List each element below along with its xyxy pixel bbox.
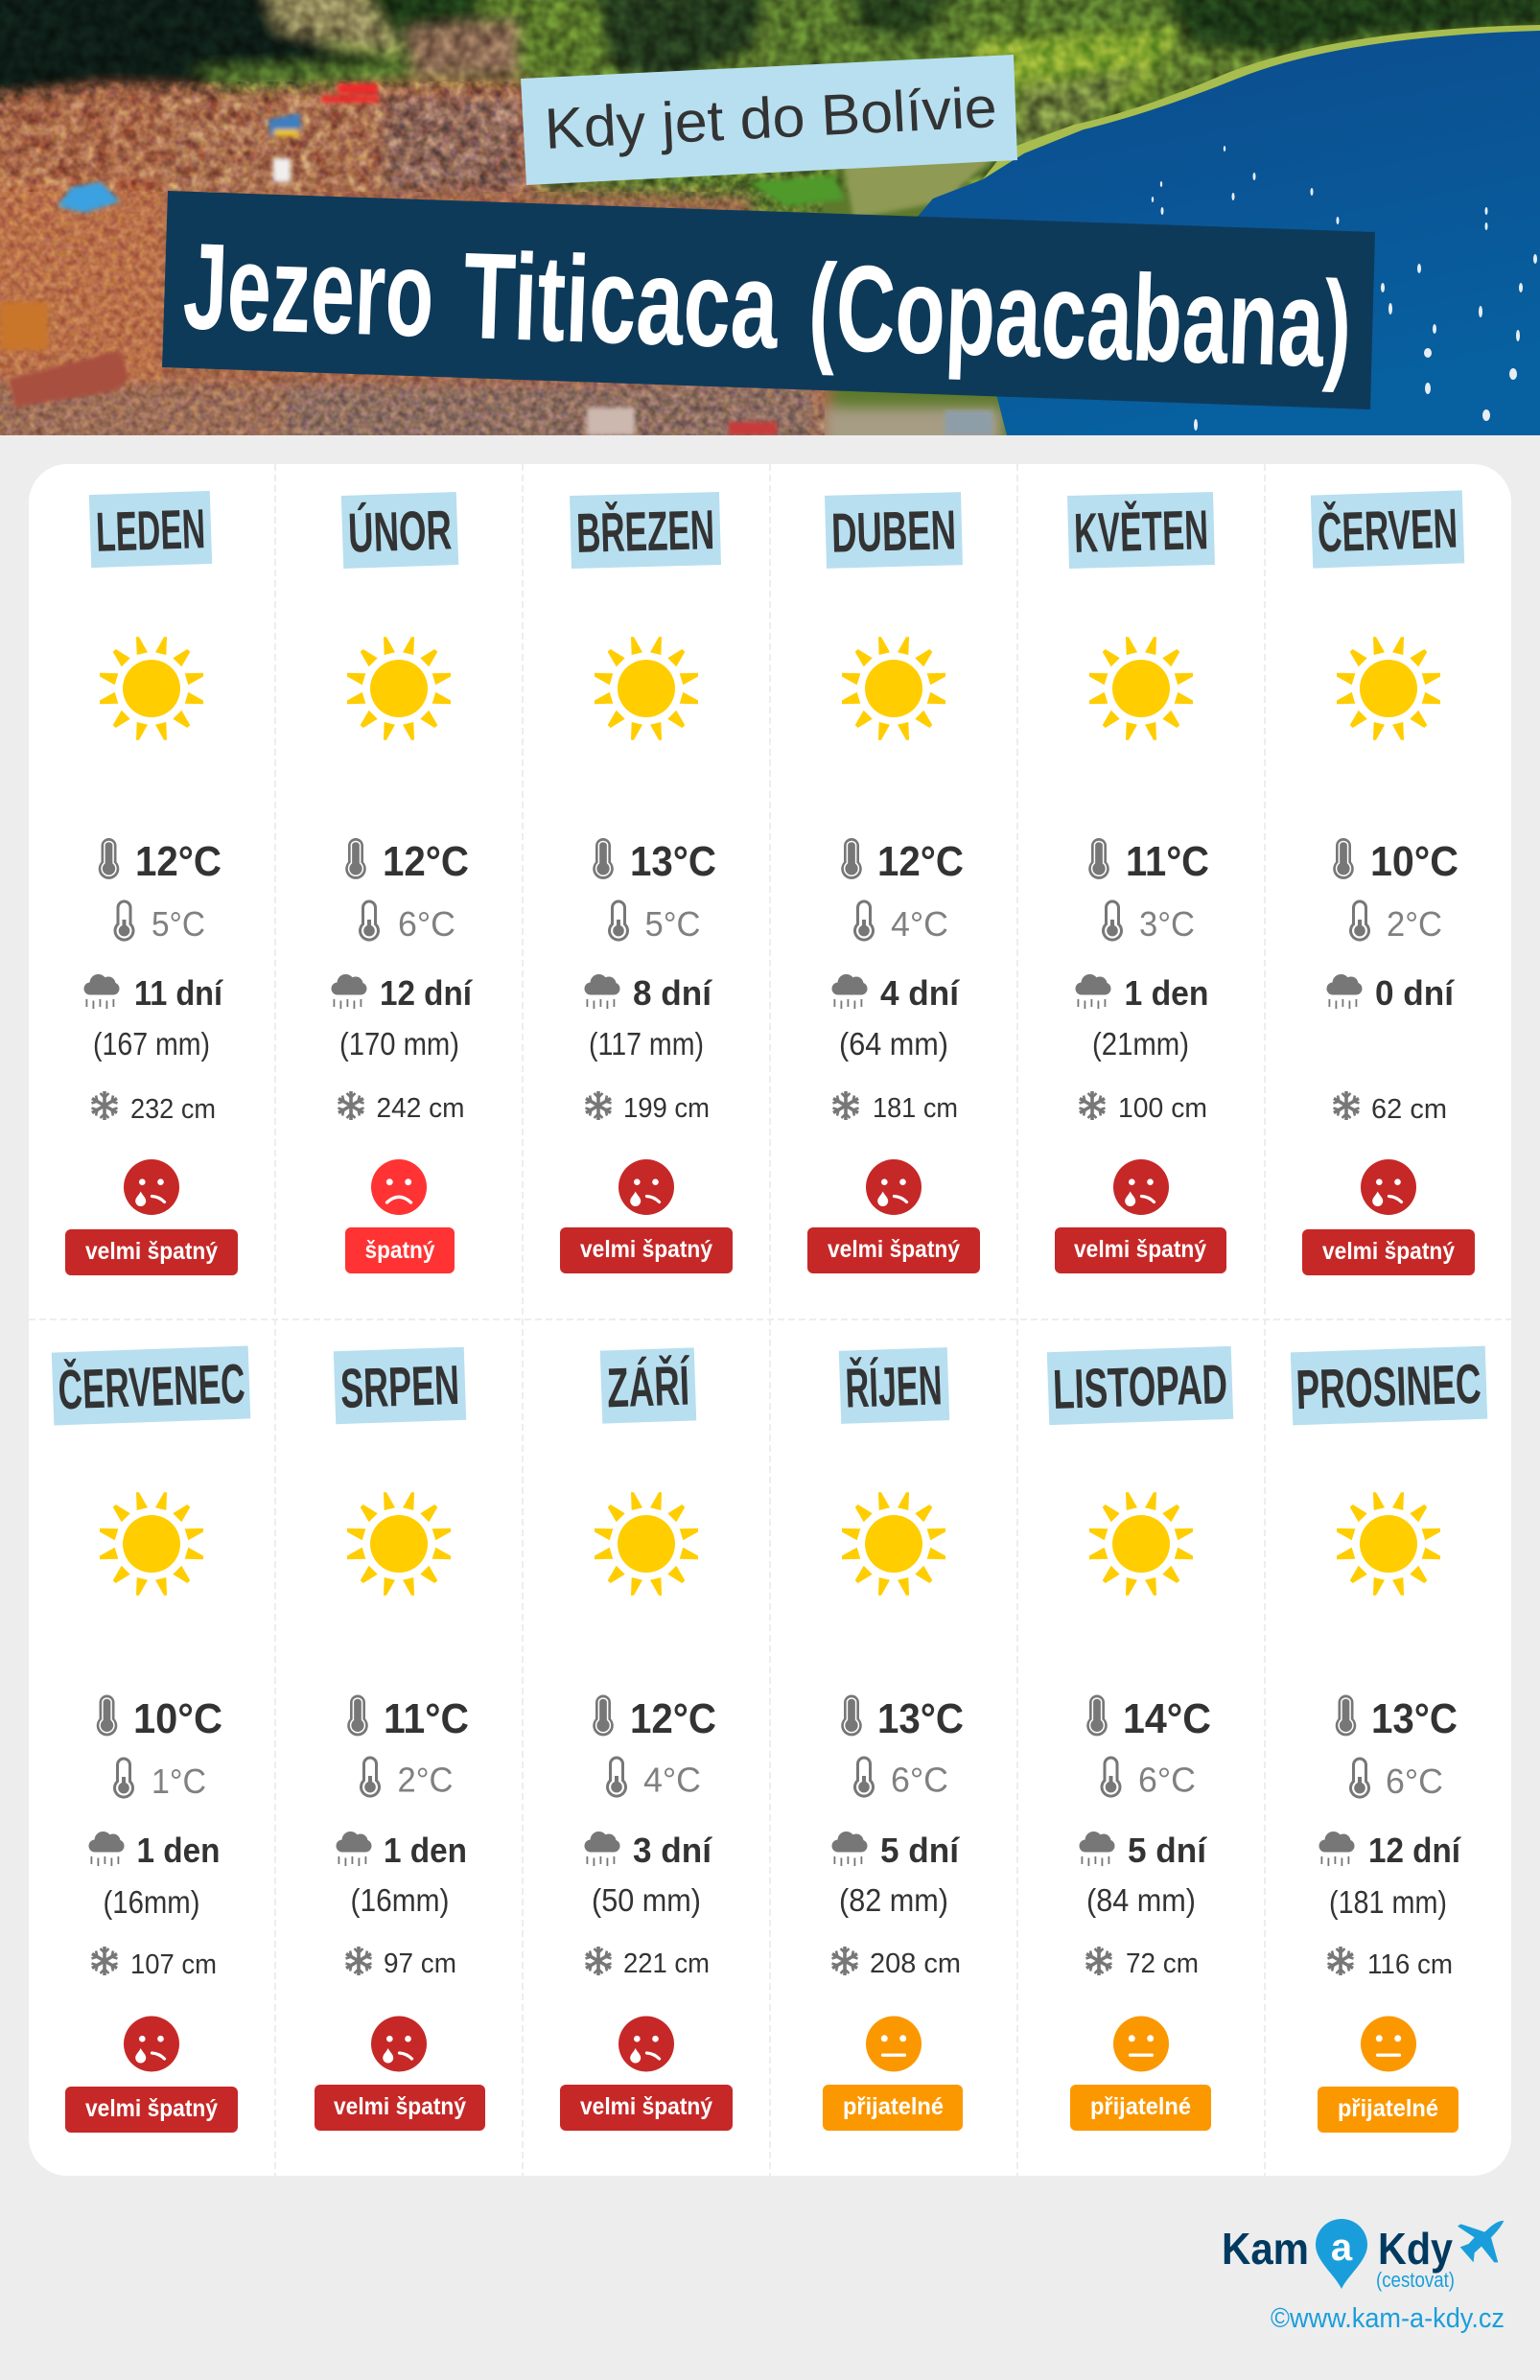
- rain days: 1 den: [1124, 973, 1208, 1013]
- min temperature: 2°C: [1387, 904, 1442, 944]
- max temperature: 11°C: [1126, 838, 1209, 885]
- rating label: [807, 1227, 980, 1273]
- snow: [585, 1091, 710, 1124]
- snow: [832, 1091, 958, 1124]
- min temperature: [606, 1757, 701, 1799]
- icon: rating face: [124, 2016, 179, 2071]
- month: červenec: [52, 1345, 250, 2133]
- logo: Kam a Kdy: Kdy: [1378, 2224, 1453, 2274]
- rain days: 0 dní: [1375, 973, 1455, 1013]
- month label: ČERVENEC: [57, 1353, 246, 1421]
- rain days: 1 den: [384, 1831, 467, 1870]
- title banner: Titicaca: [461, 227, 781, 375]
- min temperature: 1°C: [152, 1762, 206, 1801]
- rating label: velmi špatný: [580, 1236, 712, 1263]
- rating label: [65, 2087, 238, 2133]
- snow: [1080, 1091, 1207, 1124]
- min temperature: 6°C: [1386, 1762, 1443, 1801]
- month label: KVĚTEN: [1073, 499, 1209, 565]
- month: březen: [560, 492, 733, 1273]
- rain days: 4 dní: [880, 973, 960, 1013]
- rating label: velmi špatný: [334, 2093, 466, 2120]
- month label: ŘÍJEN: [844, 1354, 944, 1420]
- month label: [334, 1347, 466, 1424]
- max temperature: [347, 1695, 469, 1742]
- icon: rating face: [618, 2016, 674, 2071]
- rain days: 5 dní: [880, 1831, 960, 1870]
- month label: [1047, 1346, 1233, 1425]
- snow: 181 cm: [873, 1093, 958, 1124]
- month: únor: [332, 492, 473, 1273]
- min temperature: 3°C: [1139, 904, 1195, 944]
- month label: DUBEN: [830, 499, 957, 565]
- icon: sun: [347, 1492, 451, 1596]
- icon: sun: [842, 1492, 945, 1596]
- icon: sun: [1089, 1492, 1193, 1596]
- snow: 232 cm: [130, 1094, 216, 1125]
- month label: [825, 492, 963, 569]
- rain days: 3 dní: [633, 1831, 712, 1870]
- icon: map pin: [1316, 2219, 1367, 2289]
- town texture: [0, 82, 825, 435]
- snow: 116 cm: [1367, 1949, 1453, 1980]
- rating label: velmi špatný: [85, 2095, 218, 2122]
- month label: [52, 1345, 250, 1426]
- rainfall: (84 mm): [1086, 1882, 1196, 1918]
- snow: 100 cm: [1118, 1093, 1207, 1124]
- snow: [832, 1947, 961, 1979]
- max temperature: 13°C: [630, 838, 716, 885]
- rating label: [1302, 1229, 1475, 1275]
- snow: [585, 1947, 710, 1979]
- rainfall: (82 mm): [839, 1882, 948, 1918]
- rainfall: (181 mm): [1329, 1884, 1447, 1920]
- max temperature: [593, 838, 716, 885]
- icon: sun: [100, 637, 203, 740]
- rainfall: (16mm): [104, 1884, 199, 1920]
- rating label: [560, 2085, 733, 2131]
- max temperature: 12°C: [630, 1695, 716, 1742]
- min temperature: [113, 899, 205, 944]
- max temperature: 10°C: [1370, 838, 1458, 885]
- month label: [570, 492, 721, 569]
- min temperature: [1349, 1757, 1443, 1801]
- min temperature: [853, 899, 948, 944]
- max temperature: [1336, 1695, 1458, 1742]
- snow: [92, 1091, 216, 1125]
- forest texture: [0, 0, 1540, 192]
- icon: sun: [1089, 637, 1193, 740]
- snow: 199 cm: [623, 1093, 710, 1124]
- snow: [1333, 1091, 1447, 1125]
- rating label: [65, 1229, 238, 1275]
- month: listopad: [1047, 1346, 1233, 2131]
- icon: rating face: [1113, 1159, 1169, 1215]
- rainfall: (117 mm): [589, 1026, 704, 1062]
- rain days: [1327, 973, 1455, 1013]
- website credit: ©www.kam-a-kdy.cz: [1271, 2303, 1505, 2334]
- rating label: velmi špatný: [1074, 1236, 1206, 1263]
- snow: [1327, 1947, 1453, 1980]
- max temperature: 12°C: [135, 838, 222, 885]
- min temperature: [608, 899, 700, 944]
- icon: map pin: a: [1331, 2227, 1353, 2269]
- rain days: 1 den: [136, 1831, 221, 1870]
- rating label: velmi špatný: [85, 1238, 218, 1265]
- rainfall: (50 mm): [592, 1882, 701, 1918]
- max temperature: [1333, 838, 1458, 885]
- min temperature: 6°C: [1138, 1761, 1196, 1799]
- icon: rating face: [1113, 2016, 1169, 2071]
- logo: Kam a Kdy: (cestovat): [1376, 2268, 1455, 2292]
- max temperature: 13°C: [877, 1695, 964, 1742]
- min temperature: [113, 1757, 206, 1801]
- icon: rating face: [866, 2016, 922, 2071]
- month label: [341, 492, 458, 569]
- min temperature: 2°C: [397, 1761, 453, 1799]
- rating label: [1318, 2087, 1458, 2133]
- rating label: špatný: [364, 1237, 435, 1264]
- icon: sun: [595, 1492, 698, 1596]
- rain days: 11 dní: [134, 973, 223, 1013]
- rating label: přijatelné: [1090, 2093, 1191, 2120]
- rain days: [832, 1831, 960, 1870]
- panel: monthly climate grid: [29, 464, 1511, 2176]
- title banner: [162, 191, 1375, 409]
- max temperature: 14°C: [1123, 1695, 1211, 1742]
- rain days: [832, 973, 960, 1013]
- icon: sun: [100, 1492, 203, 1596]
- month: říjen: [823, 1347, 964, 2131]
- snow: [1085, 1947, 1199, 1979]
- header photo: Copacabana town and Lake Titicaca: [0, 0, 1540, 451]
- icon: sun: [347, 637, 451, 740]
- max temperature: 13°C: [1371, 1695, 1458, 1742]
- icon: sun: [842, 637, 945, 740]
- rain days: 12 dní: [1368, 1831, 1461, 1870]
- min temperature: 4°C: [643, 1761, 701, 1799]
- month: duben: [807, 492, 980, 1273]
- snow: [92, 1947, 217, 1980]
- max temperature: [97, 1695, 222, 1742]
- month label: LISTOPAD: [1052, 1353, 1228, 1421]
- max temperature: 11°C: [384, 1695, 469, 1742]
- snow: 221 cm: [623, 1948, 710, 1979]
- rating label: přijatelné: [843, 2093, 944, 2120]
- min temperature: 6°C: [891, 1761, 948, 1799]
- month label: [600, 1347, 696, 1424]
- rain days: 8 dní: [633, 973, 712, 1013]
- rating label: [345, 1227, 455, 1273]
- rating label: velmi špatný: [1322, 1238, 1455, 1265]
- icon: rating face: [866, 1159, 922, 1215]
- max temperature: 10°C: [133, 1695, 222, 1742]
- snow: [345, 1947, 456, 1979]
- month label: ÚNOR: [347, 499, 453, 565]
- month label: [839, 1347, 949, 1424]
- max temperature: [841, 1695, 964, 1742]
- rainfall: (64 mm): [839, 1026, 948, 1062]
- logo: Kam a Kdy: [1222, 2219, 1504, 2292]
- snow: 208 cm: [870, 1948, 961, 1979]
- min temperature: [1102, 899, 1195, 944]
- month label: LEDEN: [95, 498, 206, 564]
- rain days: [332, 973, 473, 1013]
- rating label: [1055, 1227, 1226, 1273]
- snow: 97 cm: [384, 1948, 456, 1979]
- icon: airplane: [1458, 2221, 1504, 2262]
- rain days: [1076, 973, 1208, 1013]
- snow: 62 cm: [1371, 1094, 1447, 1125]
- rainfall: (167 mm): [93, 1026, 210, 1062]
- icon: sun: [1337, 1492, 1440, 1596]
- subtitle banner: Kdy jet do Bolívie: [543, 75, 998, 161]
- icon: rating face: [371, 1159, 427, 1215]
- rating label: [315, 2085, 485, 2131]
- snow: 72 cm: [1126, 1948, 1199, 1979]
- rain days: [88, 1831, 221, 1870]
- rain days: [84, 973, 223, 1013]
- icon: rating face: [618, 1159, 674, 1215]
- snow: 242 cm: [376, 1093, 464, 1124]
- min temperature: [360, 1757, 453, 1799]
- max temperature: [841, 838, 964, 885]
- icon: rating face: [1361, 2016, 1416, 2071]
- rainfall: (170 mm): [339, 1026, 459, 1062]
- rating label: velmi špatný: [828, 1236, 960, 1263]
- max temperature: [593, 1695, 716, 1742]
- min temperature: [853, 1757, 948, 1799]
- icon: rating face: [371, 2016, 427, 2071]
- rain days: [336, 1831, 467, 1870]
- month: prosinec: [1291, 1346, 1487, 2133]
- icon: sun: [595, 637, 698, 740]
- snow: [338, 1091, 464, 1124]
- max temperature: 12°C: [877, 838, 964, 885]
- icon: rating face: [124, 1159, 179, 1215]
- rainfall: (16mm): [351, 1882, 449, 1918]
- month: květen: [1055, 492, 1226, 1273]
- month label: SRPEN: [339, 1354, 460, 1420]
- min temperature: [1101, 1757, 1196, 1799]
- month label: [1311, 490, 1464, 569]
- min temperature: [359, 899, 455, 944]
- rating label: [823, 2085, 963, 2131]
- max temperature: [1088, 838, 1209, 885]
- rain days: 5 dní: [1128, 1831, 1207, 1870]
- rating label: velmi špatný: [580, 2093, 712, 2120]
- rain days: [1319, 1831, 1461, 1870]
- rain days: [585, 973, 712, 1013]
- min temperature: 5°C: [644, 904, 700, 944]
- snow: 107 cm: [130, 1949, 217, 1980]
- month label: [89, 491, 212, 568]
- rain days: 12 dní: [380, 973, 473, 1013]
- max temperature: [345, 838, 469, 885]
- month: září: [560, 1347, 733, 2131]
- rating label: přijatelné: [1338, 2095, 1438, 2122]
- min temperature: [1349, 899, 1442, 944]
- max temperature: 12°C: [383, 838, 469, 885]
- icon: sun: [1337, 637, 1440, 740]
- month: červen: [1302, 490, 1475, 1275]
- title banner: Jezero: [181, 218, 436, 363]
- month label: [1067, 492, 1215, 569]
- max temperature: [1086, 1695, 1211, 1742]
- month label: BŘEZEN: [575, 499, 715, 565]
- icon: rating face: [1361, 1159, 1416, 1215]
- min temperature: 5°C: [152, 904, 205, 944]
- subtitle banner: [521, 55, 1017, 185]
- max temperature: [99, 838, 222, 885]
- month: leden: [65, 491, 238, 1275]
- rating label: [560, 1227, 733, 1273]
- rainfall: (21mm): [1092, 1026, 1189, 1062]
- rain days: [1080, 1831, 1207, 1870]
- logo: Kam a Kdy: Kam: [1222, 2224, 1309, 2274]
- min temperature: 6°C: [398, 904, 455, 944]
- month: srpen: [315, 1347, 485, 2131]
- rain days: [585, 1831, 712, 1870]
- rating label: [1070, 2085, 1211, 2131]
- month label: ZÁŘÍ: [606, 1355, 691, 1419]
- min temperature: 4°C: [891, 904, 948, 944]
